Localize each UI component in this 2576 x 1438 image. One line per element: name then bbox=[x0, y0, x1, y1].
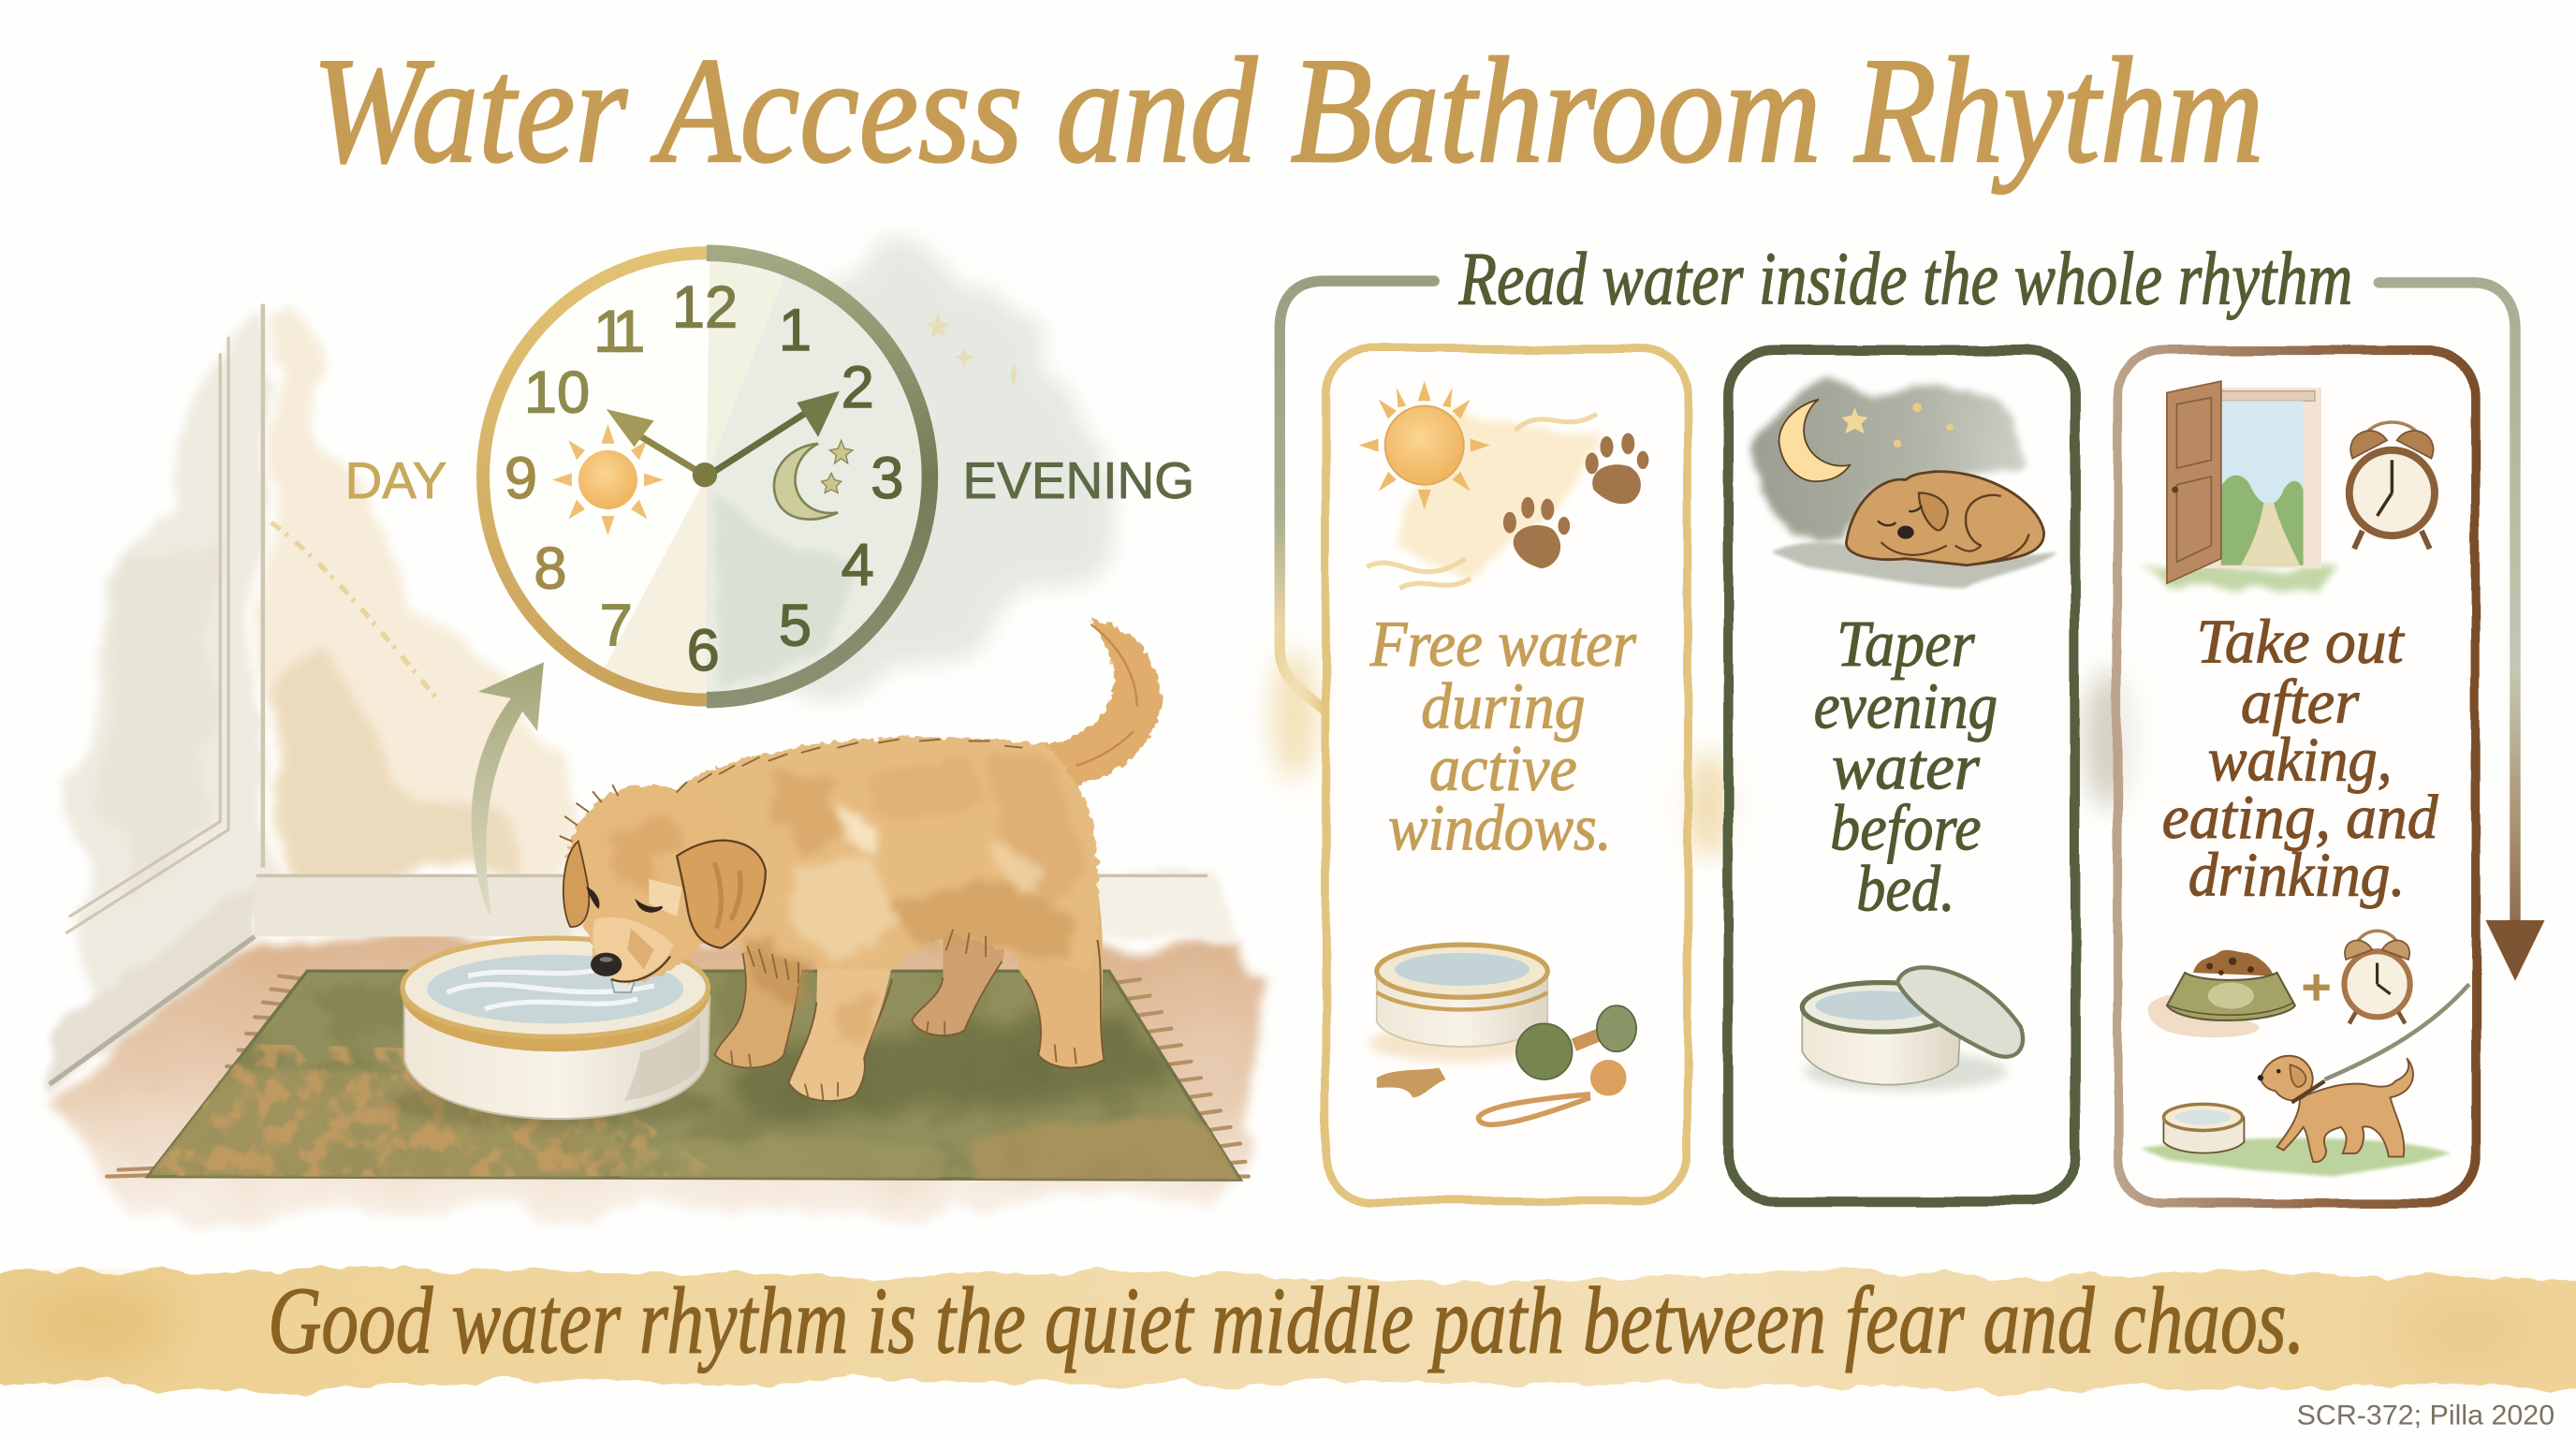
card text: eating, and bbox=[2162, 784, 2438, 852]
clock numerals: 2 bbox=[842, 355, 874, 420]
tail bbox=[1045, 620, 1162, 785]
panel: take out bbox=[2117, 350, 2476, 1203]
card text bbox=[1369, 608, 1637, 864]
icon: walking puppy bbox=[2258, 1056, 2413, 1162]
clock numerals: 12 bbox=[672, 274, 738, 340]
icon: crescent moon and stars bbox=[1779, 399, 1954, 481]
panel: free water bbox=[1325, 348, 1687, 1201]
near front leg bbox=[788, 936, 897, 1101]
icon: sun with warm wash bbox=[1358, 381, 1602, 588]
left scene: puppy drinking below the clock bbox=[46, 243, 1265, 1208]
clock numerals: 7 bbox=[600, 594, 633, 659]
floor bbox=[50, 940, 1251, 1208]
clock numerals: 10 bbox=[524, 360, 590, 426]
drip from the tongue bbox=[611, 979, 634, 992]
card text: during bbox=[1421, 669, 1586, 742]
sun icon bbox=[552, 424, 664, 536]
wall watercolor washes bbox=[72, 299, 578, 1035]
moon and stars icon bbox=[774, 440, 853, 520]
watercolor connectors between cards bbox=[1271, 649, 2136, 858]
water bowl bbox=[386, 938, 714, 1127]
card text: drinking. bbox=[2188, 841, 2405, 909]
icon: small bowl bbox=[2163, 1104, 2244, 1153]
icon: food bowl bbox=[2148, 950, 2295, 1037]
card text: Free water bbox=[1369, 608, 1637, 681]
panel heading: rhythm: Read water inside the whole rhythm bbox=[1458, 238, 2352, 321]
icon: covered water dish bbox=[1802, 967, 2023, 1091]
puppy bbox=[561, 620, 1162, 1101]
eyes bbox=[588, 888, 662, 912]
clock numerals: 8 bbox=[534, 536, 567, 601]
icon: grass patch bbox=[2141, 1138, 2452, 1177]
clock face bbox=[483, 253, 929, 700]
source note: SCR-372; Pilla 2020 bbox=[2297, 1401, 2554, 1431]
evening wash behind the clock bbox=[723, 243, 1117, 697]
mouth line bbox=[611, 956, 670, 982]
banner wash bbox=[0, 1265, 2576, 1393]
icon: toys bbox=[1377, 1005, 1636, 1124]
small stars in the wash bbox=[925, 312, 1017, 388]
muzzle bbox=[593, 917, 674, 982]
card text: active bbox=[1429, 732, 1577, 805]
card text: before bbox=[1830, 791, 1982, 864]
clock numerals: 9 bbox=[505, 446, 537, 511]
clock numerals: 5 bbox=[779, 594, 812, 659]
day label: DAY bbox=[345, 452, 446, 509]
card text: after bbox=[2241, 668, 2360, 737]
panel: taper evening water bbox=[1728, 350, 2075, 1201]
nose bbox=[591, 953, 622, 976]
far front leg bbox=[714, 929, 805, 1068]
card text: evening bbox=[1814, 669, 1998, 742]
card text: bed. bbox=[1856, 852, 1955, 925]
clock hands bbox=[607, 391, 840, 487]
icon: paw prints bbox=[1503, 433, 1648, 568]
flow line from heading into first card bbox=[1280, 281, 1434, 710]
card text: Take out bbox=[2197, 608, 2405, 676]
icon: open door to garden bbox=[2141, 381, 2333, 592]
icon: water bowl bbox=[1368, 945, 1549, 1062]
fur shading patches bbox=[742, 753, 1084, 1045]
card text bbox=[2162, 608, 2438, 909]
icon: alarm clock bbox=[2349, 422, 2435, 549]
dusk sector bbox=[601, 477, 707, 700]
night sector bbox=[700, 255, 928, 700]
card outline bbox=[2117, 350, 2476, 1203]
clock ring, evening half bbox=[707, 253, 929, 700]
clock numerals: 1 bbox=[779, 298, 812, 363]
right ear bbox=[677, 841, 766, 948]
flow arrow from heading down the right side bbox=[2378, 283, 2545, 981]
card text bbox=[1814, 608, 1998, 925]
icon: small alarm clock bbox=[2344, 931, 2410, 1023]
icon: leash bbox=[2324, 984, 2469, 1079]
evening label: EVENING bbox=[963, 452, 1194, 509]
near rear leg bbox=[1016, 888, 1104, 1068]
rug fringe bbox=[107, 976, 1249, 1177]
gold vein bbox=[271, 522, 440, 703]
clock bbox=[483, 243, 1117, 700]
title: Water Access and Bathroom Rhythm bbox=[313, 26, 2263, 194]
clock numerals: 4 bbox=[842, 533, 874, 598]
fur strokes along the outline bbox=[561, 740, 1076, 1099]
clock numerals: 3 bbox=[871, 446, 903, 511]
clock numerals: 6 bbox=[687, 618, 720, 683]
rug bbox=[107, 961, 1265, 1191]
body bbox=[681, 737, 1099, 969]
leg outlines bbox=[788, 940, 1104, 1101]
plus sign bbox=[2304, 975, 2330, 1001]
card outline bbox=[1325, 348, 1687, 1201]
left ear bbox=[564, 842, 589, 927]
rising arrow from bowl to clock bbox=[472, 662, 544, 914]
icon: sleeping puppy bbox=[1771, 472, 2056, 588]
bottom banner bbox=[0, 1265, 2576, 1393]
card text: Taper bbox=[1837, 608, 1975, 681]
card text: windows. bbox=[1388, 791, 1612, 864]
clock ring, day half bbox=[483, 253, 707, 700]
head bbox=[565, 785, 753, 982]
wall corner and panel lines bbox=[66, 304, 263, 933]
clock numerals: 11 bbox=[593, 300, 643, 365]
card text: waking, bbox=[2208, 726, 2392, 795]
clock numerals bbox=[505, 274, 903, 683]
far rear leg bbox=[912, 907, 1004, 1035]
baseboard bbox=[46, 871, 1236, 1093]
head markings bbox=[607, 814, 690, 888]
banner darker stain bbox=[24, 1286, 2530, 1367]
card outline bbox=[1728, 350, 2075, 1201]
icon: night sky wash bbox=[1754, 381, 2032, 539]
card text: water bbox=[1832, 730, 1981, 803]
